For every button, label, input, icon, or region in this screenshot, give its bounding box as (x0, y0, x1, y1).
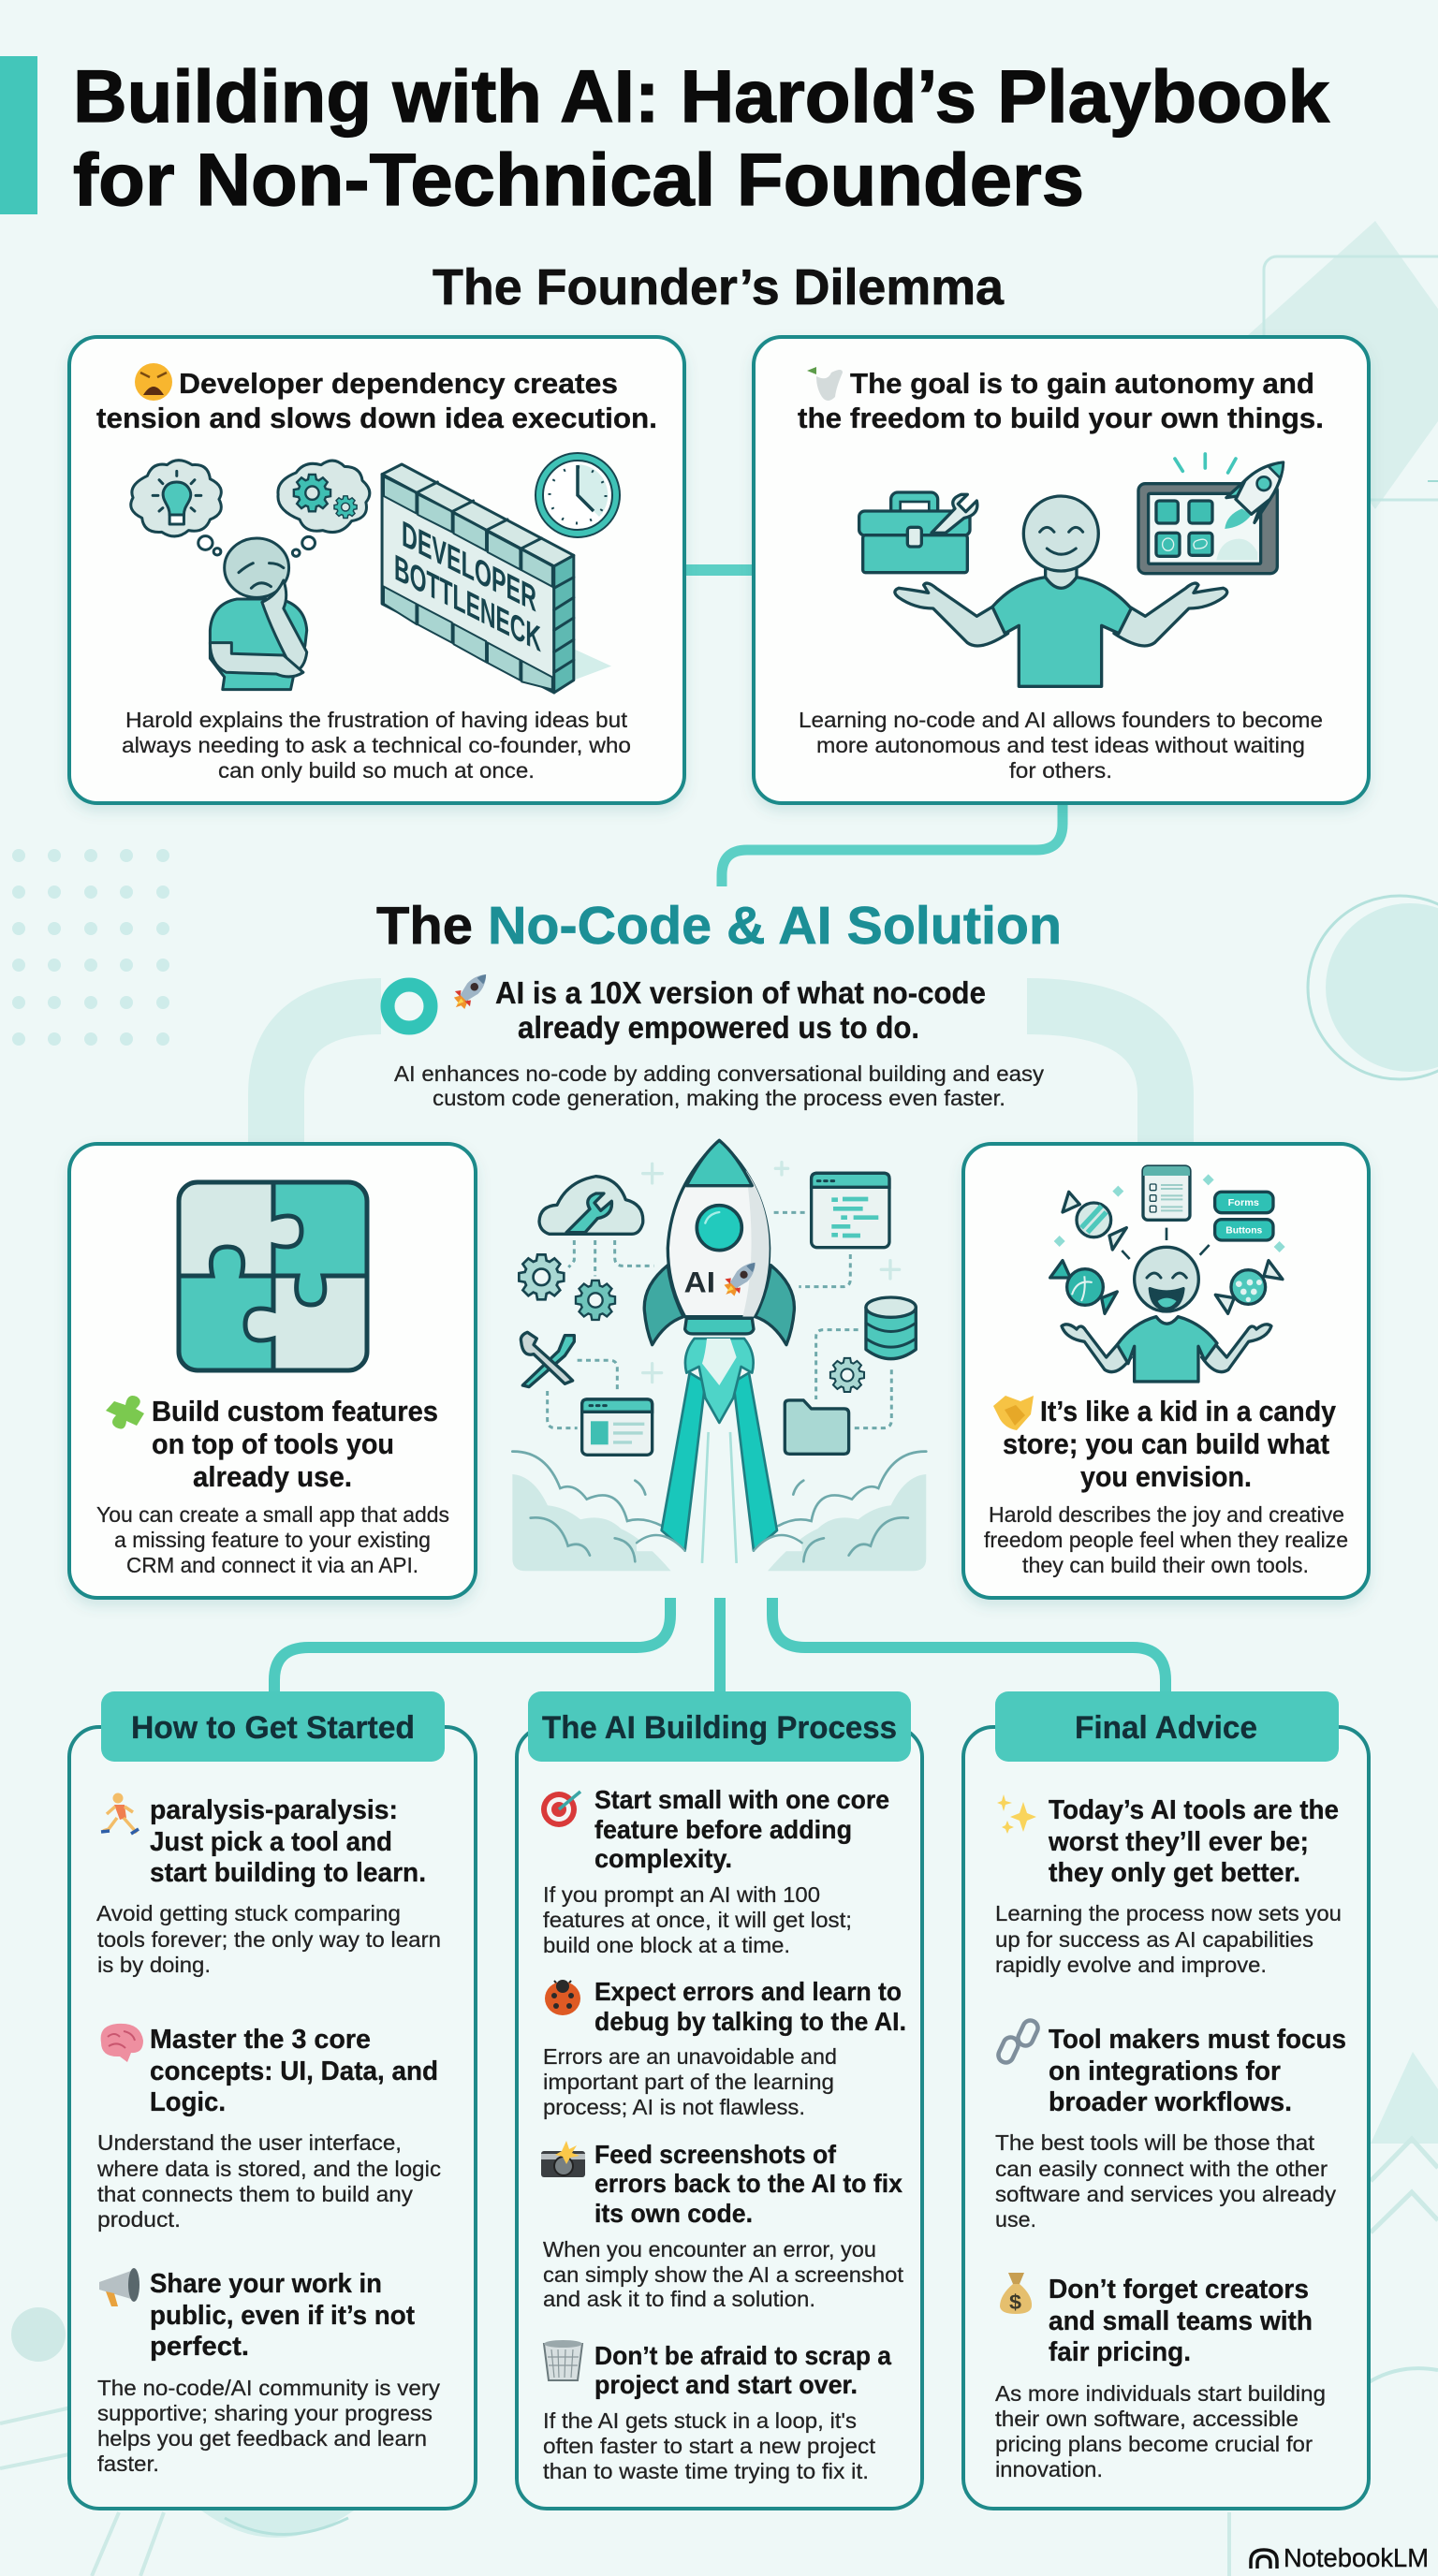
item body: Avoid getting stuck comparing (96, 1901, 401, 1925)
item heading (150, 1795, 426, 1888)
icon: green puzzle emoji (106, 1396, 144, 1428)
body text: they can build their own tools. (1022, 1553, 1309, 1577)
item body (543, 2408, 875, 2483)
item body: tools forever; the only way to learn (97, 1927, 441, 1952)
heading text (798, 367, 1324, 434)
heading text: tension and slows down idea execution. (96, 402, 657, 434)
item body: where data is stored, and the logic (96, 2157, 441, 2181)
item body: innovation. (995, 2457, 1103, 2481)
item heading: and small teams with (1049, 2306, 1313, 2336)
item body: that connects them to build any (97, 2182, 413, 2206)
item heading: start building to learn. (150, 1858, 426, 1888)
body text (122, 708, 631, 783)
body text: a missing feature to your existing (114, 1528, 431, 1552)
item heading (1048, 1795, 1339, 1888)
item body: their own software, accessible (995, 2407, 1299, 2431)
rocket body (644, 1140, 794, 1345)
item body: The best tools will be those that (995, 2130, 1314, 2155)
item heading: broader workflows. (1049, 2087, 1292, 2117)
item: integrations (995, 2018, 1346, 2232)
icon: rocket emoji on hull (724, 1263, 755, 1296)
column header (995, 1691, 1339, 1762)
item body: When you encounter an error, you (543, 2237, 876, 2261)
item heading: its own code. (594, 2199, 753, 2228)
title (73, 54, 1330, 221)
icon: waste basket (544, 2340, 582, 2380)
sparkle accents (643, 1163, 900, 1383)
item body (995, 2130, 1336, 2232)
item body: faster. (97, 2452, 159, 2476)
illustration: smiling founder with toolbox and launch tablet (859, 454, 1284, 686)
key message: AI is a 10X version of what no-code (495, 975, 986, 1010)
item body: rapidly evolve and improve. (995, 1953, 1267, 1977)
heading text: the freedom to build your own things. (798, 402, 1324, 434)
item: start small (541, 1785, 889, 1957)
key message (495, 975, 986, 1045)
item: fair pricing (995, 2273, 1326, 2481)
item heading (1049, 2025, 1346, 2117)
item: share in public (97, 2268, 440, 2476)
heading text (96, 367, 657, 434)
icon: rocket emoji (454, 974, 486, 1009)
item: pick a tool (96, 1793, 441, 1977)
item: feed screenshots (541, 2140, 903, 2311)
item body: often faster to start a new project (543, 2434, 875, 2458)
item heading: worst they’ll ever be; (1048, 1827, 1309, 1857)
item heading: fair pricing. (1049, 2337, 1191, 2367)
item body: process; AI is not flawless. (543, 2095, 805, 2119)
illustration: delighted founder juggling candy and UI: Forms (1228, 1198, 1259, 1208)
panel: candy store (963, 1144, 1369, 1598)
icon: folder (785, 1400, 849, 1454)
item body (543, 2237, 903, 2311)
item heading (150, 2269, 415, 2362)
solution description: custom code generation, making the process even faster. (433, 1086, 1005, 1110)
heading: the no-code and AI solution: The (376, 896, 473, 956)
item heading: they only get better. (1049, 1858, 1300, 1888)
item body: As more individuals start building (995, 2381, 1326, 2406)
item heading: project and start over. (594, 2370, 858, 2399)
panel: autonomy goal (754, 337, 1369, 803)
item heading: Expect errors and learn to (594, 1977, 902, 2006)
item heading: Master the 3 core (150, 2025, 371, 2055)
item body: build one block at a time. (543, 1933, 790, 1957)
heading: the no-code and AI solution: No-Code & AI Solution (488, 896, 1062, 956)
item heading: concepts: UI, Data, and (150, 2056, 438, 2086)
icon: database (866, 1297, 916, 1359)
heading text: already use. (193, 1460, 352, 1493)
column header: How to Get Started (131, 1710, 415, 1746)
body text (96, 1502, 449, 1577)
item body: is by doing. (97, 1953, 211, 1977)
icon: link (996, 2018, 1040, 2065)
heading text: on top of tools you (152, 1427, 394, 1460)
item body: and ask it to find a solution. (543, 2287, 815, 2311)
dashed connectors (548, 1212, 891, 1428)
item body: pricing plans become crucial for (995, 2432, 1313, 2456)
column header: Final Advice (1075, 1710, 1257, 1746)
item heading: on integrations for (1049, 2056, 1281, 2086)
item heading: debug by talking to the AI. (594, 2007, 906, 2036)
item body: Learning the process now sets you (995, 1901, 1342, 1925)
icon: solution ring (388, 985, 431, 1028)
body text: more autonomous and test ideas without waiting (816, 733, 1305, 757)
item body: important part of the learning (543, 2070, 834, 2094)
item heading: paralysis-paralysis: (150, 1795, 398, 1825)
item heading: Start small with one core (594, 1785, 889, 1814)
column header: The AI Building Process (542, 1710, 897, 1746)
item heading: Don’t be afraid to scrap a (594, 2341, 891, 2370)
body text: can only build so much at once. (218, 758, 535, 783)
body text: for others. (1009, 758, 1112, 783)
item body: up for success as AI capabilities (995, 1927, 1313, 1952)
icon: dove (807, 367, 843, 401)
item body: can simply show the AI a screenshot (543, 2262, 903, 2287)
key message: already empowered us to do. (518, 1010, 919, 1045)
icon: ladybug (545, 1980, 580, 2015)
body text (984, 1502, 1348, 1577)
item body: software and services you already (995, 2182, 1336, 2206)
item body: helps you get feedback and learn (97, 2426, 427, 2451)
item heading: Just pick a tool and (150, 1827, 392, 1857)
heading text: It’s like a kid in a candy (1040, 1395, 1337, 1427)
item: scrap a project (543, 2340, 891, 2483)
item heading: Today’s AI tools are the (1049, 1795, 1339, 1825)
solution description (394, 1061, 1044, 1110)
body text: Harold describes the joy and creative (989, 1502, 1344, 1527)
title: Building with AI: Harold’s Playbook (73, 54, 1330, 138)
item body (97, 2376, 440, 2476)
icon: target (541, 1792, 580, 1827)
item: AI tools improve (995, 1794, 1342, 1977)
NotebookLM logo: NotebookLM (1284, 2543, 1429, 2572)
panel: final advice (963, 1691, 1369, 2509)
body text: freedom people feel when they realize (984, 1528, 1348, 1552)
arrows: connectors to the three columns (274, 1598, 1166, 1694)
illustration: frustrated founder and developer wall (131, 457, 616, 693)
item heading (594, 2341, 891, 2399)
heading text: The goal is to gain autonomy and (850, 367, 1314, 400)
illustration: delighted founder juggling candy and UI (1050, 1166, 1285, 1382)
column header (101, 1691, 445, 1762)
item heading: perfect. (150, 2332, 249, 2362)
icon: brain (101, 2024, 143, 2062)
item heading (1049, 2275, 1313, 2367)
panel: custom features (69, 1144, 476, 1598)
illustration: frustrated founder and developer wall: BOTTLENECK (394, 547, 541, 660)
heading text: Build custom features (152, 1395, 438, 1427)
item heading (594, 1785, 889, 1873)
item heading: Tool makers must focus (1049, 2025, 1346, 2055)
panel: developer dependency (69, 337, 684, 803)
body text: Learning no-code and AI allows founders to become (799, 708, 1323, 732)
icon: crossed tools (521, 1332, 574, 1387)
item heading: Logic. (150, 2087, 226, 2117)
item heading (150, 2025, 438, 2117)
icon: sparkles (997, 1794, 1036, 1834)
title accent bar (0, 56, 37, 214)
panel: the AI building process (517, 1691, 922, 2509)
item body (96, 1901, 441, 1977)
body text: Harold explains the frustration of having ideas but (125, 708, 627, 732)
heading text (152, 1395, 438, 1493)
item heading: feature before adding (594, 1815, 852, 1844)
item body: The no-code/AI community is very (97, 2376, 440, 2400)
item: expect errors (543, 1977, 906, 2119)
item heading: Share your work in (150, 2269, 382, 2299)
icon: megaphone (99, 2268, 139, 2306)
central rocket illustration (512, 1140, 926, 1571)
icon: app window (582, 1399, 653, 1455)
item body: use. (995, 2207, 1036, 2232)
item heading (594, 1977, 906, 2036)
item body: product. (97, 2207, 181, 2232)
body text (799, 708, 1323, 783)
arrow: connector between dilemma cards (684, 564, 754, 576)
icon: money bag: $ (1009, 2291, 1021, 2314)
item: core concepts (96, 2024, 441, 2232)
solution description: AI enhances no-code by adding conversational building and easy (394, 1061, 1044, 1086)
heading text: you envision. (1080, 1460, 1252, 1493)
item heading: Feed screenshots of (594, 2140, 837, 2169)
item body (995, 1901, 1342, 1977)
item heading: complexity. (594, 1844, 732, 1873)
item body (543, 2044, 837, 2119)
item heading (594, 2140, 902, 2228)
heading: the founder's dilemma: The Founder’s Dilemma (433, 259, 1005, 315)
item body: Errors are an unavoidable and (543, 2044, 837, 2069)
title: for Non-Technical Founders (73, 138, 1084, 221)
item heading: public, even if it’s not (150, 2301, 415, 2331)
icon: handshake emoji (993, 1396, 1034, 1430)
icon: money bag (1000, 2273, 1032, 2314)
illustration: delighted founder juggling candy and UI: Buttons (1225, 1226, 1263, 1237)
icons: gears (519, 1254, 864, 1392)
item body: supportive; sharing your progress (97, 2401, 433, 2425)
heading text (1003, 1395, 1337, 1493)
body text: You can create a small app that adds (96, 1502, 449, 1527)
item body: If the AI gets stuck in a loop, it's (543, 2408, 857, 2433)
column header (528, 1691, 911, 1762)
body text: always needing to ask a technical co-founder, who (122, 733, 631, 757)
item body (995, 2381, 1326, 2481)
body text: CRM and connect it via an API. (126, 1553, 418, 1577)
icon: runner (101, 1793, 139, 1834)
launch clouds (512, 1452, 926, 1571)
item body: than to waste time trying to fix it. (543, 2459, 869, 2483)
icon: four-piece puzzle (179, 1182, 367, 1370)
heading text: store; you can build what (1003, 1427, 1329, 1460)
rocket AI label: AI (684, 1266, 715, 1298)
icon: weary face (135, 363, 172, 401)
item heading: Don’t forget creators (1049, 2275, 1309, 2305)
icon: camera with flash (541, 2141, 585, 2177)
item body: Understand the user interface, (97, 2130, 402, 2155)
heading text: Developer dependency creates (179, 367, 618, 400)
arrow: connector from goal card to solution (722, 803, 1063, 886)
panel: how to get started (69, 1691, 476, 2509)
item body: features at once, it will get lost; (543, 1908, 852, 1932)
item body (96, 2130, 441, 2232)
icon: cloud with wrench (539, 1177, 643, 1234)
item body: If you prompt an AI with 100 (543, 1882, 820, 1907)
item body: can easily connect with the other (995, 2157, 1328, 2181)
exhaust beams (637, 1339, 802, 1563)
icon: code window (812, 1173, 889, 1248)
item heading: errors back to the AI to fix (594, 2169, 902, 2198)
illustration: frustrated founder and developer wall: DEVELOPER (402, 513, 536, 620)
item body (543, 1882, 852, 1957)
